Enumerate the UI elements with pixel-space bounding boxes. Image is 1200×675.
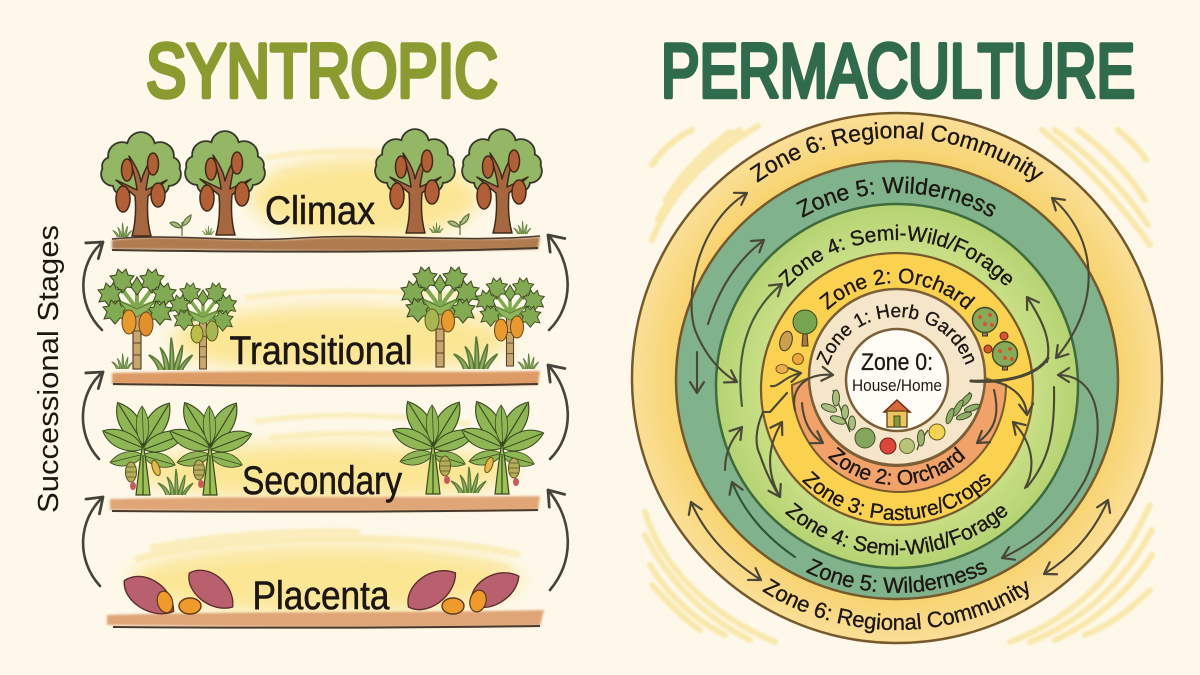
soil (112, 371, 540, 386)
zone labels (750, 122, 1044, 634)
ring: zone 6 (632, 113, 1162, 643)
ring: zone 2 orange (792, 378, 1006, 492)
soil (112, 236, 540, 252)
label: zone 4 bottom: Zone 4: Semi-Wild/Forage (784, 502, 1008, 556)
chart: permaculture zones concentric rings (632, 113, 1162, 643)
decorative yellow washes (645, 126, 1152, 642)
label: zone 6 bottom: Zone 6: Regional Community (762, 578, 1029, 634)
seedlings (113, 214, 531, 237)
label: zone 5 bottom: Zone 5: Wilderness (806, 558, 987, 594)
undergrowth (112, 336, 539, 370)
label: Climax (265, 189, 375, 233)
arrows: stage progression (83, 235, 568, 590)
undergrowth (158, 467, 486, 495)
sun wash (130, 532, 520, 614)
label: zone 1 top: Zone 1: Herb Garden (816, 304, 974, 366)
label: Placenta (252, 574, 390, 618)
label: zone 4 top: Zone 4: Semi-Wild/Forage (778, 224, 1012, 288)
sweet potatoes (117, 560, 526, 623)
cacao trees (102, 130, 541, 236)
icons: herbs, produce and house (820, 390, 981, 454)
label: zone 2 bottom: Zone 2: Orchard (828, 446, 966, 485)
icon: house (884, 400, 910, 427)
panel: climax stage (102, 130, 541, 252)
panel: secondary stage (99, 397, 547, 512)
arrows: zone flows (691, 193, 1108, 580)
panel: placenta stage (107, 532, 544, 628)
ring: zone 5 (676, 161, 1118, 599)
soil (107, 610, 544, 628)
ring: zone 1 (809, 289, 985, 465)
label: Secondary (242, 459, 402, 503)
axis label: successional stages: Successional Stages (33, 225, 65, 513)
label: zone 5 top: Zone 5: Wilderness (796, 176, 996, 218)
ring: zone 0 (846, 329, 948, 431)
icons: orchard trees and fruit (776, 308, 1018, 374)
title: Syntropic: SYNTROPIC (146, 29, 498, 114)
sun wash (170, 291, 510, 374)
label: zone 0: Zone 0: (861, 349, 933, 376)
papaya trees (98, 267, 544, 369)
label: zone 3 bottom: Zone 3: Pasture/Crops (802, 470, 991, 520)
label: house/home: House/Home (852, 376, 942, 395)
banana plants (99, 397, 547, 495)
label: zone 2 top: Zone 2: Orchard (819, 268, 976, 310)
panel: transitional stage (98, 267, 544, 386)
label: Transitional (230, 329, 412, 373)
label: zone 6 top: Zone 6: Regional Community (750, 122, 1044, 183)
ring: zone 2 and 3 yellow (761, 253, 1033, 525)
sun wash (250, 151, 480, 238)
ring: zone 4 (716, 204, 1078, 568)
soil (110, 496, 540, 512)
sun wash (135, 415, 515, 500)
